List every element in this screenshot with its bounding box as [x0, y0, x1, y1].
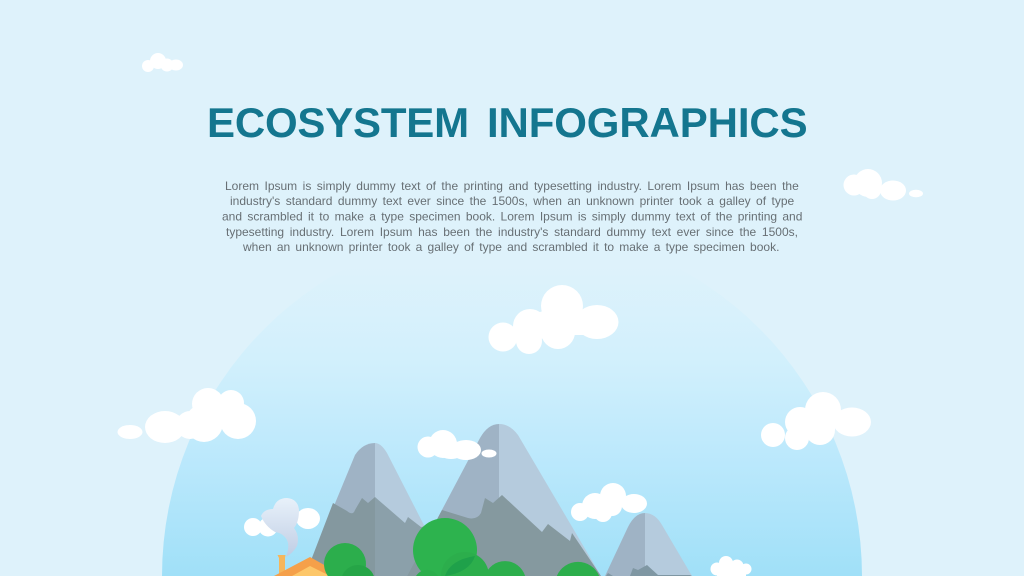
tree: right	[557, 562, 599, 576]
cloud: right of centre mountain	[571, 483, 647, 522]
body text: typesetting industry. Lorem Ipsum has been the industry's standard dummy text ever since the 1500s,	[226, 225, 798, 239]
body text: industry's standard dummy text ever since the 1500s, when an unknown printer took a galley of type	[230, 194, 795, 208]
title: INFOGRAPHICS	[487, 99, 807, 146]
chimney	[278, 555, 286, 576]
smoke	[261, 498, 299, 557]
title: ECOSYSTEM	[207, 99, 469, 146]
cloud: top left	[142, 53, 183, 72]
cloud: right large	[761, 392, 871, 450]
cloud: top right	[844, 169, 923, 200]
body text: and scrambled it to make a type specimen book. Lorem Ipsum is simply dummy text of the printing and	[222, 210, 802, 224]
tree: centre right	[485, 561, 525, 576]
cloud: bottom right	[710, 556, 752, 576]
body text: when an unknown printer took a galley of type and scrambled it to make a type specimen book.	[242, 240, 779, 254]
mountain: centre	[407, 424, 601, 576]
tree: centre front leaf	[445, 556, 475, 576]
cloud: left large	[118, 388, 256, 443]
cloud: over mountains	[418, 430, 496, 460]
body text	[222, 179, 802, 254]
tree: left	[324, 543, 366, 576]
tree: centre low	[416, 570, 438, 576]
house roof	[274, 557, 344, 576]
mountain: left	[305, 443, 452, 576]
sky dome	[162, 226, 862, 576]
tree: centre front	[441, 552, 489, 576]
body text: Lorem Ipsum is simply dummy text of the printing and typesetting industry. Lorem Ipsum has been the	[225, 179, 799, 193]
tree: centre big	[413, 518, 477, 576]
cloud: behind smoke	[244, 508, 320, 536]
mountain: right	[605, 513, 692, 576]
tree: left small	[342, 565, 374, 576]
cloud: centre large	[488, 285, 618, 354]
trees	[324, 518, 599, 576]
